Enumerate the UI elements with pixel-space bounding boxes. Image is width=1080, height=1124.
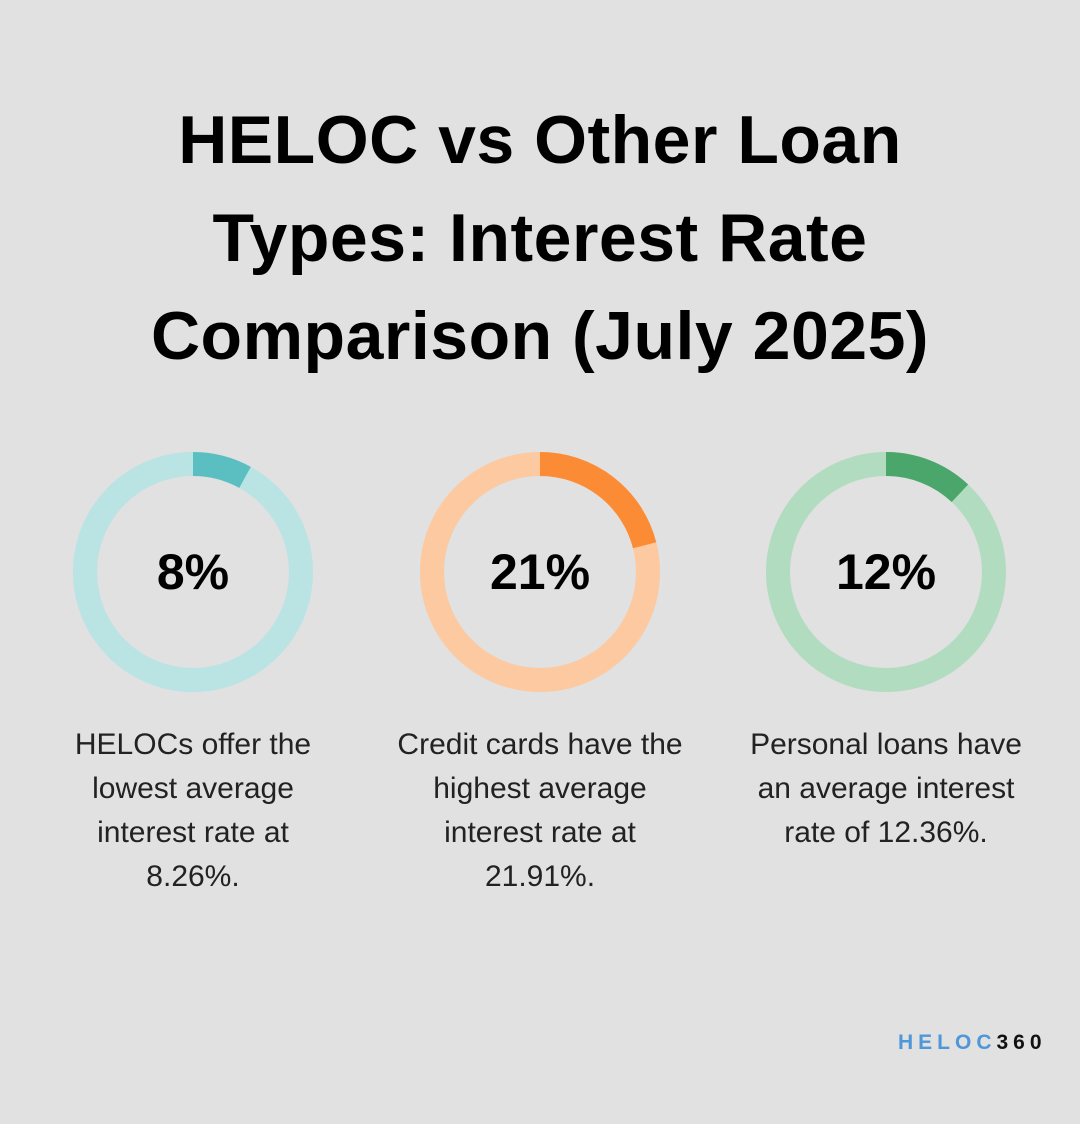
description xyxy=(397,728,683,893)
description: rate of 12.36%. xyxy=(784,816,988,849)
donut chart: 8% xyxy=(73,452,313,692)
donut chart: 12%: 12% xyxy=(836,544,936,600)
donut chart: 21% xyxy=(420,452,660,692)
title: HELOC vs Other Loan xyxy=(178,102,902,178)
title: Types: Interest Rate xyxy=(213,200,867,276)
description: interest rate at xyxy=(97,816,289,849)
description: Credit cards have the xyxy=(397,728,683,761)
logo: HELOC360 xyxy=(898,1031,1047,1054)
donut chart: 21%: 21% xyxy=(490,544,590,600)
title: Comparison (July 2025) xyxy=(151,298,929,374)
description: interest rate at xyxy=(444,816,636,849)
description: 21.91%. xyxy=(485,860,595,893)
title xyxy=(151,102,929,374)
description: 8.26%. xyxy=(146,860,240,893)
donut chart: 12% xyxy=(766,452,1006,692)
description: HELOCs offer the xyxy=(75,728,311,761)
panel: credit cards xyxy=(397,452,683,893)
description: highest average xyxy=(433,772,647,805)
description xyxy=(75,728,311,893)
description: Personal loans have xyxy=(750,728,1022,761)
panel: personal loans xyxy=(750,452,1022,849)
description: an average interest xyxy=(758,772,1014,805)
panel: HELOC xyxy=(73,452,313,893)
description xyxy=(750,728,1022,849)
description: lowest average xyxy=(92,772,294,805)
donut chart: 8%: 8% xyxy=(157,544,229,600)
